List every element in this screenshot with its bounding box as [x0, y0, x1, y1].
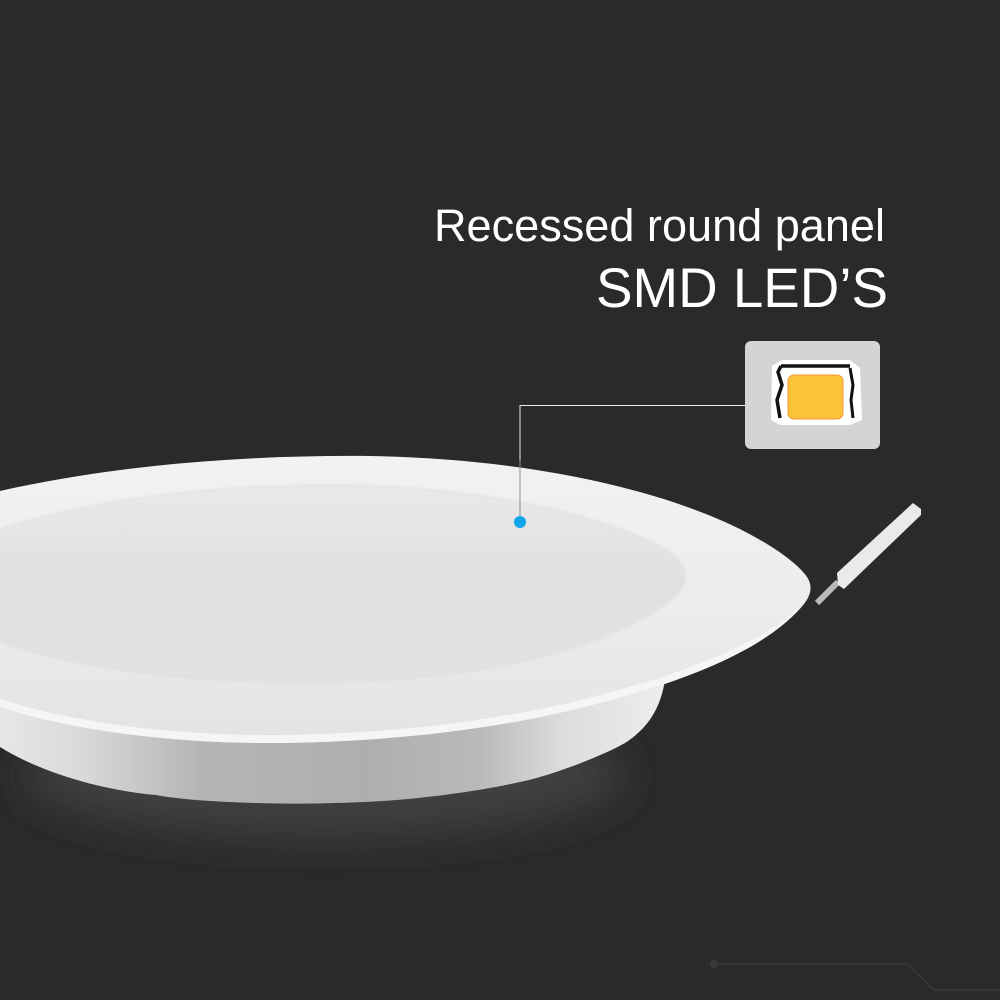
- leader line over panel: [519, 460, 521, 520]
- LED emitter: [788, 375, 843, 419]
- blue dot: [514, 516, 526, 528]
- panel flange: [0, 456, 811, 743]
- panel body: [0, 680, 665, 804]
- diffuser ring: [0, 484, 687, 683]
- chip outline right: [850, 368, 853, 418]
- decorative circuit line: [710, 960, 1000, 990]
- diffuser: [0, 487, 684, 680]
- chip base: [745, 341, 880, 449]
- title text: [434, 200, 888, 319]
- wire metal: [817, 582, 838, 603]
- product: LED panel: [0, 456, 921, 804]
- flange lower lip: [0, 604, 804, 743]
- heading: recessed round panel: Recessed round panel: [434, 200, 885, 251]
- product shadow glow: [25, 713, 625, 837]
- wire sleeve: [837, 503, 921, 589]
- callout: [514, 341, 880, 528]
- chip outline top: [781, 364, 850, 368]
- wire: [817, 503, 921, 603]
- chip frame: [771, 360, 862, 425]
- leader line: [520, 406, 745, 460]
- heading: SMD LED'S: SMD LED’S: [596, 256, 888, 319]
- SMD LED chip icon: [745, 341, 880, 449]
- chip outline left: [777, 366, 782, 418]
